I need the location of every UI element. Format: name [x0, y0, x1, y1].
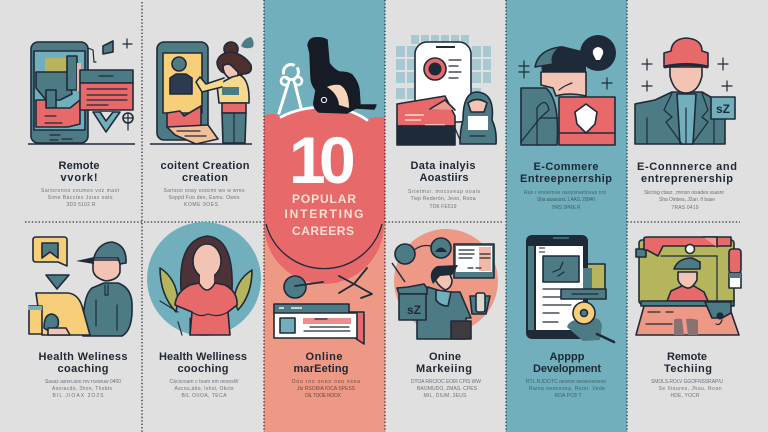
description: health wellness: BIL OIIOA, TECA: [182, 393, 227, 399]
title: popular interting careers: CAREERS: [292, 224, 354, 238]
heading: remote techiing: Remote: [667, 351, 707, 363]
description: online marketing: Jtz RSORIA IOCA SPESS: [297, 386, 356, 392]
heading: data analysis: Aoastiirs: [420, 172, 468, 184]
icon: woman in teal circle: [147, 222, 261, 336]
heading: health weliness coaching: coaching: [58, 363, 108, 375]
icon: phone and gear: [526, 235, 614, 342]
description: content creation: KOME 9OES: [184, 202, 219, 208]
panel: content creation: [150, 37, 254, 208]
heading: health weliness coaching: Health Weliness: [38, 351, 128, 363]
description: health wellness: Cácicrsam c tsam nm oesnsW: [170, 379, 239, 385]
description: health weliness: Asoracdo, 3hon, Thsbts: [52, 386, 112, 392]
description: data analysis: [408, 189, 480, 210]
panel: remote work: [28, 39, 135, 208]
description: content creation: [164, 188, 245, 208]
description: onine markeiing: BAOMUDO, ZMAS. CPES: [417, 386, 478, 392]
description: health wellness: Ascou,ábo, Ishst, Okcts: [174, 386, 234, 392]
heading: appp development: Apppp: [550, 351, 585, 363]
description: onine markeiing: DTOA RRCIOC EOIR CPIS WW: [411, 379, 481, 385]
icon: creator with phone: [150, 37, 254, 144]
description: e-commerce: 7IRS 2PRE R: [552, 205, 581, 211]
heading: e-commerce: E-Commere: [534, 161, 598, 173]
description: remote work: [41, 188, 120, 208]
description: health weliness: [45, 379, 121, 399]
description: e-connerce: 7RAS 0419: [672, 205, 699, 211]
heading: health wellness coaching: cooching: [178, 363, 228, 375]
icon: marketer with screen: [392, 229, 498, 339]
description: remote work: Sime Bácctes Joias oats: [48, 195, 113, 201]
title: popular interting careers: [284, 192, 364, 238]
heading: online marketing: [294, 351, 348, 375]
heading: remote work: Remote: [58, 160, 100, 172]
heading: appp development: Development: [533, 363, 601, 375]
heading: onine markeiing: Onine: [429, 351, 461, 363]
icon: black cat and compass: [279, 38, 376, 120]
heading: data analysis: Data inalyis: [410, 160, 476, 172]
heading: remote techiing: [664, 351, 712, 375]
icon: browser and network: [274, 268, 372, 344]
icon: entrepreneur with laptop: [519, 35, 616, 145]
description: remote techiing: SMOLS.ROLV GGOFNSSRAP/U: [651, 379, 723, 385]
description: online marketing: [292, 379, 360, 399]
heading: remote work: [58, 160, 100, 184]
icon: phone with chat: [28, 39, 135, 144]
description: health wellness: [170, 379, 239, 399]
description: data analysis: Srtetmsi. mocsseup ooais: [408, 189, 480, 195]
panel: online marketing salmon: [274, 268, 372, 399]
heading: e-connerce and entrepreneurship: entreprenership: [641, 173, 733, 185]
description: app development: RDA PC8 T: [554, 393, 582, 399]
description: data analysis: TO6 FE519: [430, 204, 457, 210]
icon: marketer with screen: sZ: [407, 303, 421, 317]
description: health weliness: BIL JIOAX 2O2S: [52, 393, 104, 399]
icon: teacher on video call: [636, 237, 741, 335]
title: number ten: 10: [289, 123, 356, 197]
description: app development: Raina oeseoosa, Reoir. Vede: [529, 386, 605, 392]
heading: remote techiing: Techiing: [664, 363, 712, 375]
heading: data analysis: [410, 160, 476, 184]
heading: remote work: vvork!: [60, 172, 98, 184]
panel: e-commerce entrepreneurship teal: [519, 35, 616, 211]
description: online marketing: Doo roo oooo ooo ssoa: [292, 379, 360, 385]
panel: health wellness coaching left: [28, 237, 132, 399]
description: e-connerce: [644, 190, 724, 211]
description: remote work: 3D3 5102 R: [66, 202, 96, 208]
icon: phone with data grid: [396, 35, 496, 145]
description: app development: RTL RJOOTC oeoroe oeoevoeoroo: [526, 379, 606, 385]
description: onine markeiing: MIL, DIUM, 3EUS: [424, 393, 467, 399]
heading: onine markeiing: Markeiing: [416, 363, 472, 375]
panel: online marketing person: [392, 229, 498, 399]
description: e-commerce: Ras r enoernoe oaoysnamosus nrs: [524, 190, 606, 196]
description: content creation: Soppd Foo den, Esmu. Owes: [168, 195, 240, 201]
heading: online marketing: Online: [306, 351, 342, 363]
description: e-connerce: Sha Oinbea, J2an. ñ base: [659, 197, 715, 203]
description: data analysis: Tiep Rederón, Jeoo, Rooa: [410, 196, 476, 202]
description: e-connerce: Slicrisg ctasz. ;mrosn oisades ssasnr: [644, 190, 724, 196]
heading: health wellness coaching: [159, 351, 247, 375]
description: content creation: Sartsoo ooay ooisimi wo w wres: [164, 188, 245, 194]
panel: e-commerce and entrepreneurship: [635, 38, 737, 211]
heading: e-commerce: Entreepnerrship: [520, 173, 612, 185]
panel: remote teaching: [636, 237, 741, 399]
title: popular interting careers: INTERTING: [284, 207, 364, 221]
description: remote techiing: HDE, YOCR: [670, 393, 700, 399]
panel: app development: [526, 235, 614, 399]
icon: man in red cap and suit: sZ: [716, 102, 730, 116]
heading: e-connerce and entrepreneurship: [637, 161, 737, 185]
heading: online marketing: marEeting: [294, 363, 348, 375]
heading: content creation: creation: [182, 172, 228, 184]
description: e-commerce: Sha aasaoost, 1 AAS, 20840: [537, 197, 595, 203]
description: app development: [526, 379, 606, 399]
description: onine markeiing: [411, 379, 481, 399]
description: remote techiing: [651, 379, 723, 399]
description: remote techiing: Se Ilioures, Jhuu, Roan: [658, 386, 722, 392]
description: online marketing: DIL TOOE NOOX: [305, 393, 342, 399]
heading: onine markeiing: [416, 351, 472, 375]
panel: main title: [279, 38, 376, 238]
heading: content creation: coitent Creation: [160, 160, 250, 172]
heading: content creation: [160, 160, 250, 184]
heading: health weliness coaching: [38, 351, 128, 375]
description: health weliness: Sasaz asnsr.aoo rov rcearuw 0400: [45, 379, 121, 385]
heading: health wellness coaching: Health Welliness: [159, 351, 247, 363]
panel: health wellness coaching woman: [147, 222, 261, 399]
icon: man in red cap and suit: [635, 38, 735, 144]
title: popular interting careers: POPULAR: [292, 192, 356, 206]
heading: e-connerce and entrepreneurship: E-Connnerce and: [637, 161, 737, 173]
heading: appp development: [533, 351, 601, 375]
panel: data analysis: [396, 35, 496, 210]
description: remote work: Sartsronoo soumes voz mast: [41, 188, 120, 194]
heading: e-commerce: [520, 161, 612, 185]
icon: coach at laptop: [28, 237, 132, 336]
description: e-commerce: [524, 190, 606, 211]
